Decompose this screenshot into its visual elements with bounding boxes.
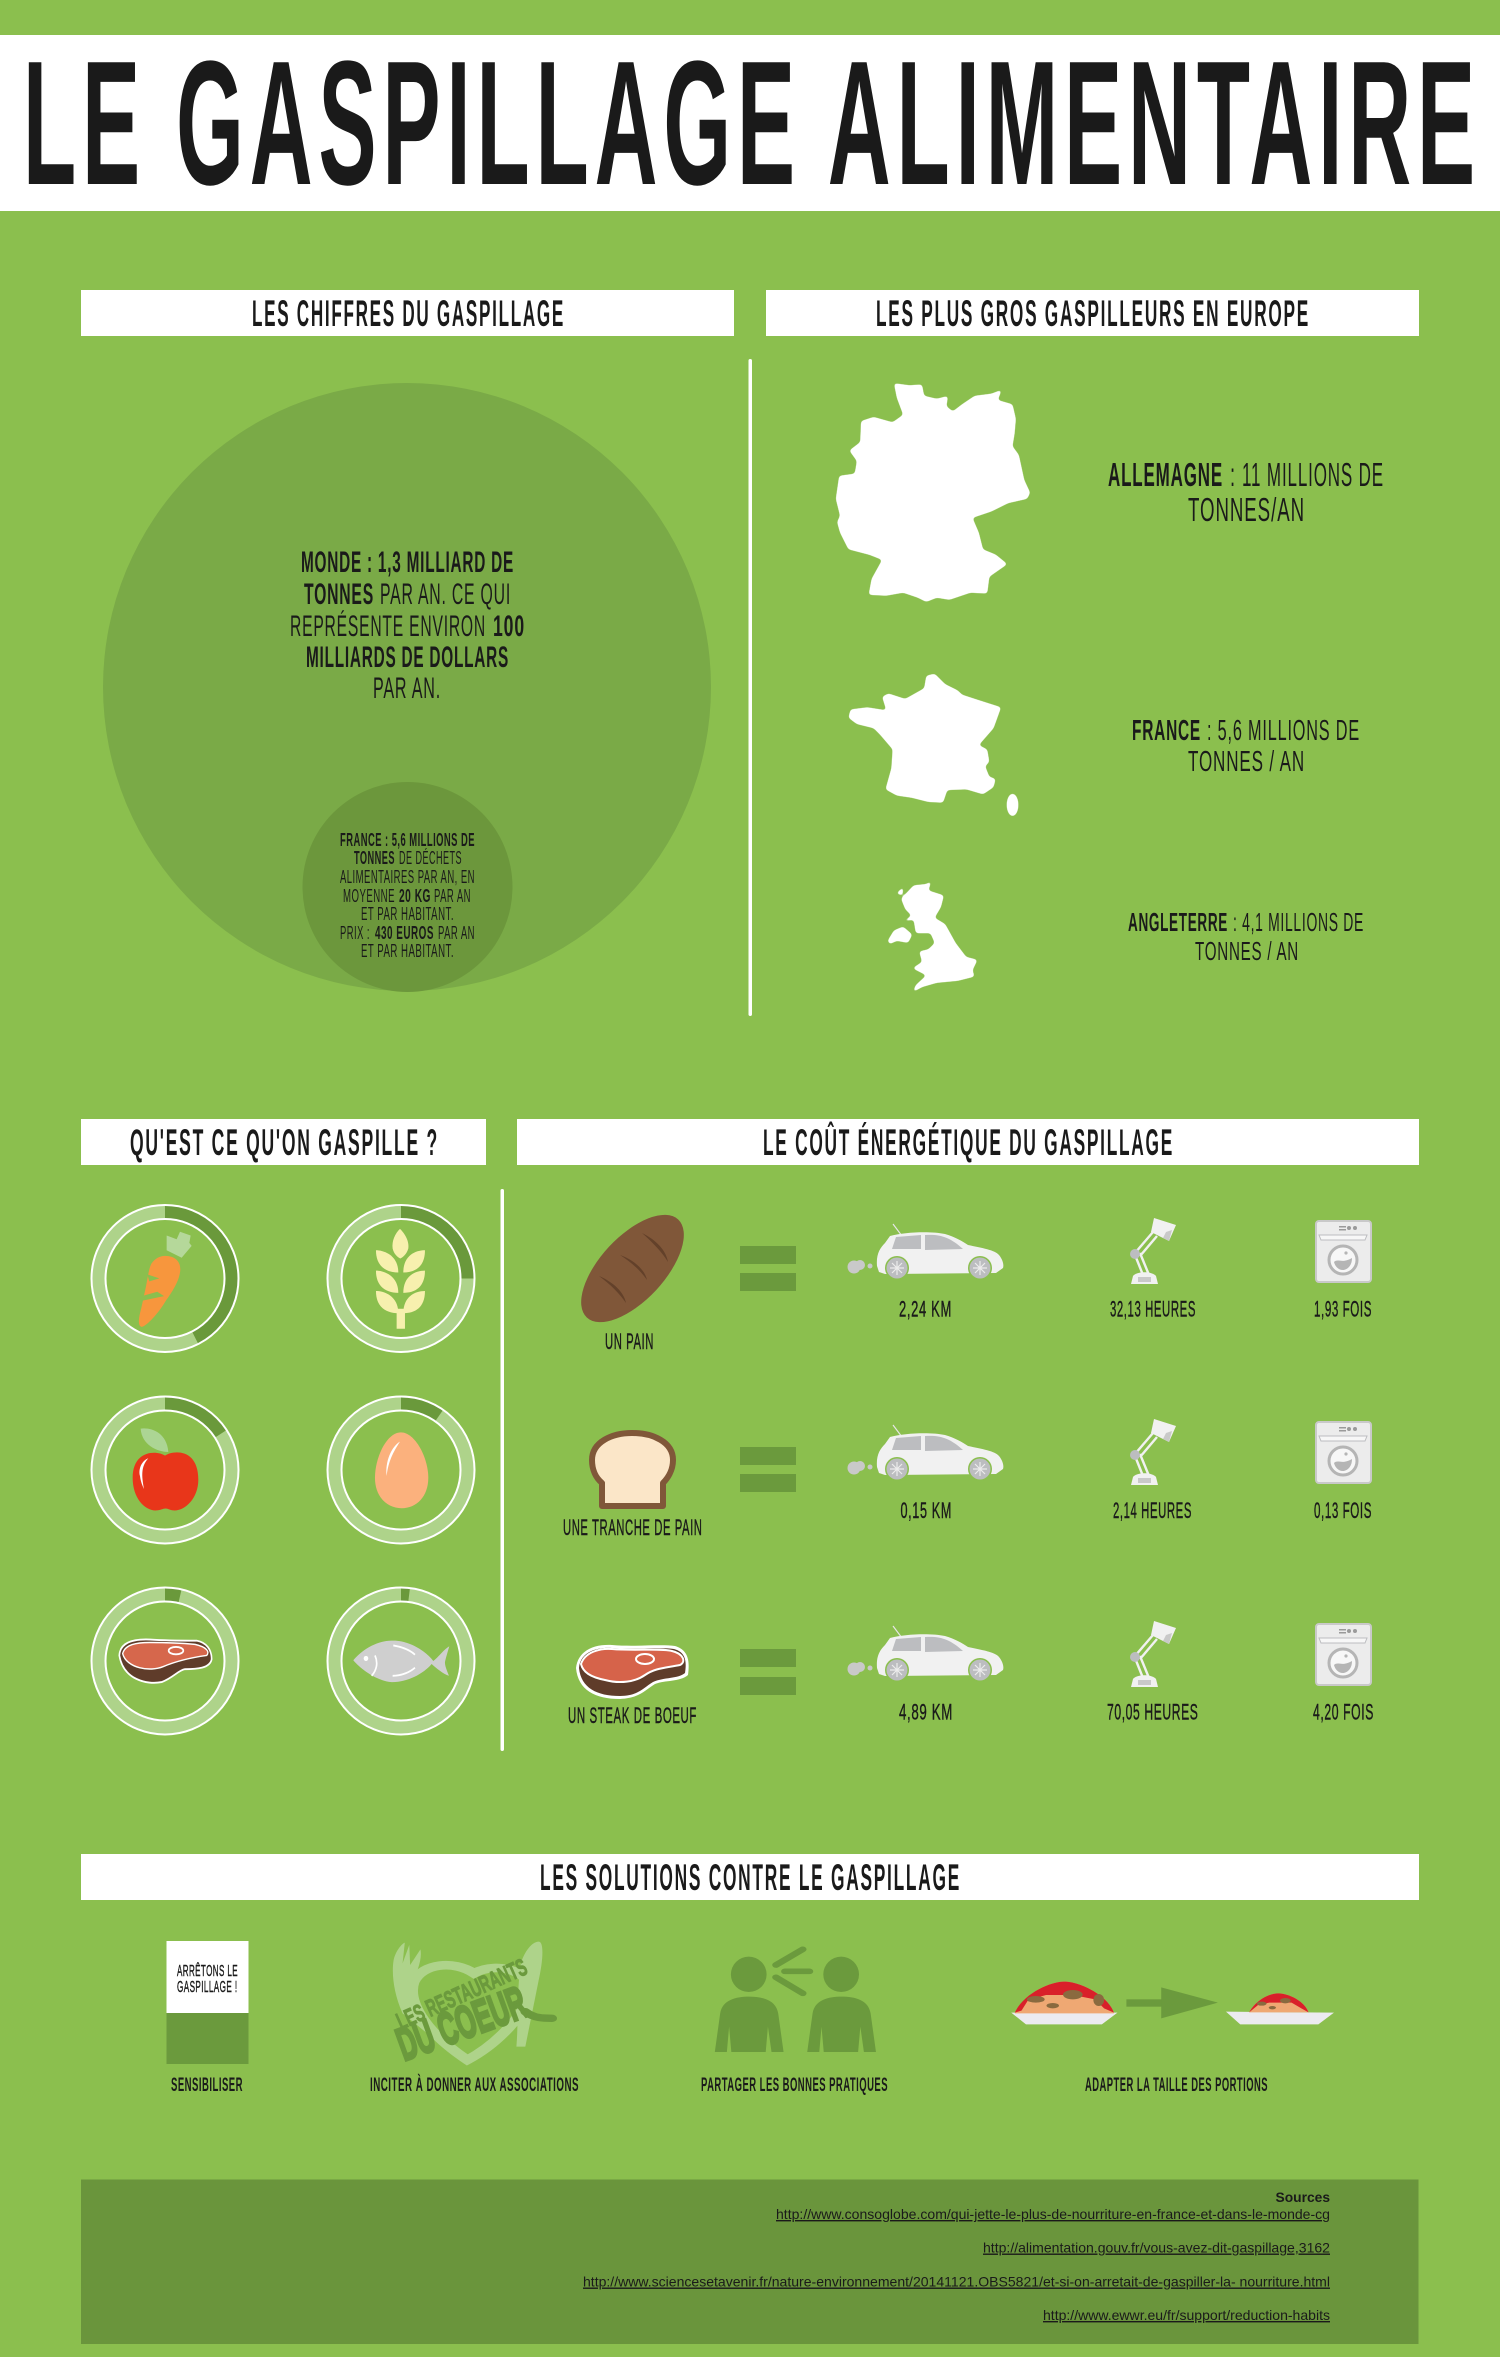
text: England: TONNES / AN <box>1195 936 1299 966</box>
text: Germany: ALLEMAGNE <box>1108 456 1223 493</box>
heading: les chiffres du gaspillage <box>81 290 734 336</box>
label: hours: 2,14 HEURES <box>1113 1498 1192 1523</box>
icon: lamp <box>1130 1218 1176 1284</box>
label: steak: UN STEAK DE BOEUF <box>568 1703 697 1728</box>
label: distance: 2,24 KM <box>899 1296 952 1322</box>
icon: equals <box>740 1246 796 1291</box>
icon: fish <box>353 1641 449 1682</box>
text block: world figures: MILLIARDS DE DOLLARS <box>306 641 509 674</box>
text: France <box>1132 715 1360 778</box>
text: England: ANGLETERRE <box>1128 907 1228 937</box>
text block: France figures: ET PAR HABITANT. <box>361 941 454 961</box>
label: hours: 70,05 HEURES <box>1107 1700 1198 1724</box>
heading: qu'est ce qu'on gaspille <box>81 1119 486 1165</box>
icon: map of Germany <box>836 383 1030 602</box>
solution: adapt portion sizes <box>1011 1982 1334 2096</box>
circle: world <box>103 383 711 991</box>
text block: world figures: MONDE : 1,3 MILLIARD DE <box>301 546 514 579</box>
circle: France <box>302 782 512 992</box>
label: loaf: UN PAIN <box>605 1329 654 1354</box>
panel: world and France circles <box>103 383 711 992</box>
icon: Restaurants du Coeur logo: LES RESTAURANTS <box>392 1954 531 2035</box>
icon: washing machine <box>1316 1422 1371 1483</box>
text block: France figures: PAR AN <box>434 886 471 906</box>
text block: sources list: Sources <box>1276 2189 1330 2205</box>
solution: adapt portion sizes: ADAPTER LA TAILLE DES PORTIONS <box>1085 2075 1268 2096</box>
text: Germany: TONNES/AN <box>1188 491 1305 528</box>
solution: donate to associations <box>370 1942 579 2096</box>
heading: qu'est ce qu'on gaspille: QU'EST CE QU'ON GASPILLE ? <box>130 1122 439 1163</box>
heading: les solutions contre le gaspillage: LES SOLUTIONS CONTRE LE GASPILLAGE <box>540 1857 961 1898</box>
text block: world figures: PAR AN. CE QUI <box>380 578 511 611</box>
label: washes: 4,20 FOIS <box>1313 1700 1374 1724</box>
icon: equals <box>740 1649 796 1695</box>
icon: Restaurants du Coeur logo <box>390 1942 552 2070</box>
label: distance: 4,89 KM <box>899 1700 953 1724</box>
text block: world figures: PAR AN. <box>373 672 441 705</box>
icon: steak <box>119 1639 212 1683</box>
row: bread loaf energy cost <box>563 1198 1372 1354</box>
text: France: TONNES / AN <box>1188 746 1305 778</box>
text block: sources list: http://alimentation.gouv.fr/vous-avez-dit-gaspillage,3162 <box>983 2240 1330 2256</box>
icon: car <box>848 1626 1003 1682</box>
text: England <box>1128 907 1364 966</box>
icon: poster <box>166 1941 248 2064</box>
icon: equals <box>740 1447 796 1492</box>
heading: les plus gros gaspilleurs en europe <box>766 290 1419 336</box>
icon: poster: GASPILLAGE ! <box>177 1979 238 1996</box>
label: bread slice: UNE TRANCHE DE PAIN <box>563 1515 702 1540</box>
text block: France figures: 20 KG <box>399 886 431 906</box>
text block: France figures <box>340 830 475 961</box>
label: sensibiliser: SENSIBILISER <box>171 2075 243 2096</box>
text block: France figures: TONNES <box>354 848 395 868</box>
label: washes: 1,93 FOIS <box>1314 1296 1372 1322</box>
label: distance: 0,15 KM <box>900 1498 952 1523</box>
text block: sources list: http://www.consoglobe.com/qui-jette-le-plus-de-nourriture-en-france-et-dans-le-monde-cg <box>776 2206 1330 2222</box>
icon: lamp <box>1130 1419 1176 1485</box>
icon: steak <box>576 1645 689 1699</box>
text block: France figures: ET PAR HABITANT. <box>361 904 454 924</box>
text block: France figures: ALIMENTAIRES PAR AN, EN <box>340 867 475 887</box>
text: PARTAGER LES BONNES PRATIQUES <box>701 2075 888 2096</box>
text block: France figures: DE DÉCHETS <box>399 848 462 868</box>
icon: car <box>848 1224 1003 1280</box>
icon: carrot <box>139 1232 192 1327</box>
ring chart: meat <box>92 1588 238 1734</box>
solution: raise awareness <box>166 1941 248 2096</box>
text block: France figures: PAR AN <box>438 923 475 943</box>
icon: lamp <box>1130 1621 1176 1687</box>
ring chart: carrot <box>92 1205 238 1352</box>
label: inciter: INCITER À DONNER AUX ASSOCIATIONS <box>370 2074 579 2096</box>
text block: world figures: REPRÉSENTE ENVIRON <box>290 610 486 643</box>
text block: sources list: http://www.ewwr.eu/fr/support/reduction-habits <box>1043 2307 1330 2323</box>
arrow: to smaller portion <box>1126 1987 1218 2018</box>
text: England: : 4,1 MILLIONS DE <box>1233 907 1364 937</box>
icon: washing machine <box>1316 1221 1371 1282</box>
text block: world figures: 100 <box>493 610 525 643</box>
icon: small plate of pasta <box>1226 1993 1334 2024</box>
icon: map of France <box>848 674 1018 816</box>
icon: bread slice <box>592 1433 673 1506</box>
icon: map of the United Kingdom <box>888 881 978 993</box>
solution: share good practices <box>701 1949 888 2096</box>
ring chart: cereals <box>328 1205 474 1352</box>
icon: loaf <box>563 1198 702 1339</box>
icon: apple <box>133 1428 198 1510</box>
icon: egg <box>375 1432 428 1508</box>
icon: two people talking <box>715 1949 876 2052</box>
text: Germany: : <box>1230 456 1236 493</box>
icon: car <box>848 1425 1003 1481</box>
text block: sources list <box>583 2189 1330 2323</box>
heading: les solutions contre le gaspillage <box>81 1854 1419 1900</box>
row: beef steak energy cost <box>568 1621 1374 1728</box>
label: hours: 32,13 HEURES <box>1110 1296 1196 1322</box>
ring chart: fish <box>328 1588 474 1734</box>
panel: sources <box>81 2180 1418 2344</box>
label: washes: 0,13 FOIS <box>1314 1498 1372 1523</box>
ring chart: fruit <box>92 1396 238 1544</box>
icon: big plate of pasta <box>1011 1982 1117 2024</box>
text block: France figures: PRIX : <box>340 923 370 943</box>
heading: le coût énergétique du gaspillage <box>517 1119 1419 1165</box>
text block: France figures: MOYENNE <box>343 886 395 906</box>
icon: poster: ARRÊTONS LE <box>177 1963 238 1980</box>
text block: France figures: 430 EUROS <box>375 923 434 943</box>
text: Germany <box>1108 456 1384 528</box>
icon: washing machine <box>1316 1624 1371 1685</box>
icon: wheat <box>376 1229 425 1329</box>
text block: world figures: TONNES <box>304 578 374 611</box>
text block: world figures <box>290 546 525 705</box>
text: France: FRANCE <box>1132 715 1201 747</box>
icon: Restaurants du Coeur logo: DU COEUR <box>390 1976 533 2070</box>
heading: les chiffres du gaspillage: LES CHIFFRES DU GASPILLAGE <box>252 293 565 334</box>
text block: sources list: http://www.sciencesetavenir.fr/nature-environnement/20141121.OBS5821/et-si-on-arretait-de-gaspiller-la- nourriture.html <box>583 2274 1330 2290</box>
text: France: : 5,6 MILLIONS DE <box>1207 715 1360 747</box>
text block: France figures: FRANCE : 5,6 MILLIONS DE <box>340 830 475 850</box>
row: bread slice energy cost <box>563 1419 1372 1540</box>
ring chart: eggs <box>328 1396 474 1544</box>
